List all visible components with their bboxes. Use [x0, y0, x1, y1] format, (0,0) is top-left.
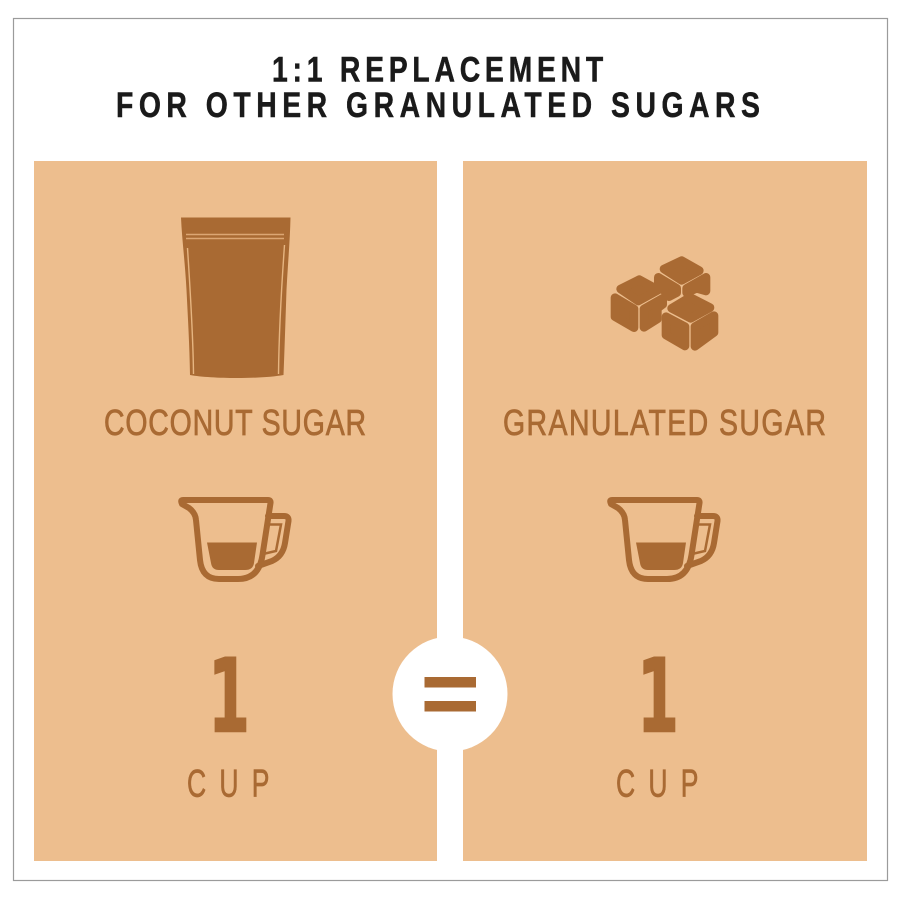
label: granulated sugar: GRANULATED SUGAR — [503, 402, 826, 443]
unit: cup: CUP — [187, 763, 283, 806]
equals badge — [392, 636, 508, 752]
number: 1: 1 — [637, 638, 679, 756]
icon: coconut sugar pouch — [181, 218, 290, 378]
label: coconut sugar: COCONUT SUGAR — [104, 402, 366, 443]
number: 1: 1 — [208, 638, 250, 756]
title: FOR OTHER GRANULATED SUGARS — [116, 85, 760, 125]
icon: sugar cubes — [615, 261, 714, 346]
title: 1:1 REPLACEMENT — [272, 49, 604, 89]
panel: granulated sugar — [463, 161, 867, 861]
panel: coconut sugar — [34, 161, 437, 861]
icon: measuring cup — [181, 500, 289, 579]
title — [116, 49, 760, 125]
icon: measuring cup — [610, 500, 718, 579]
unit: cup: CUP — [616, 763, 712, 806]
